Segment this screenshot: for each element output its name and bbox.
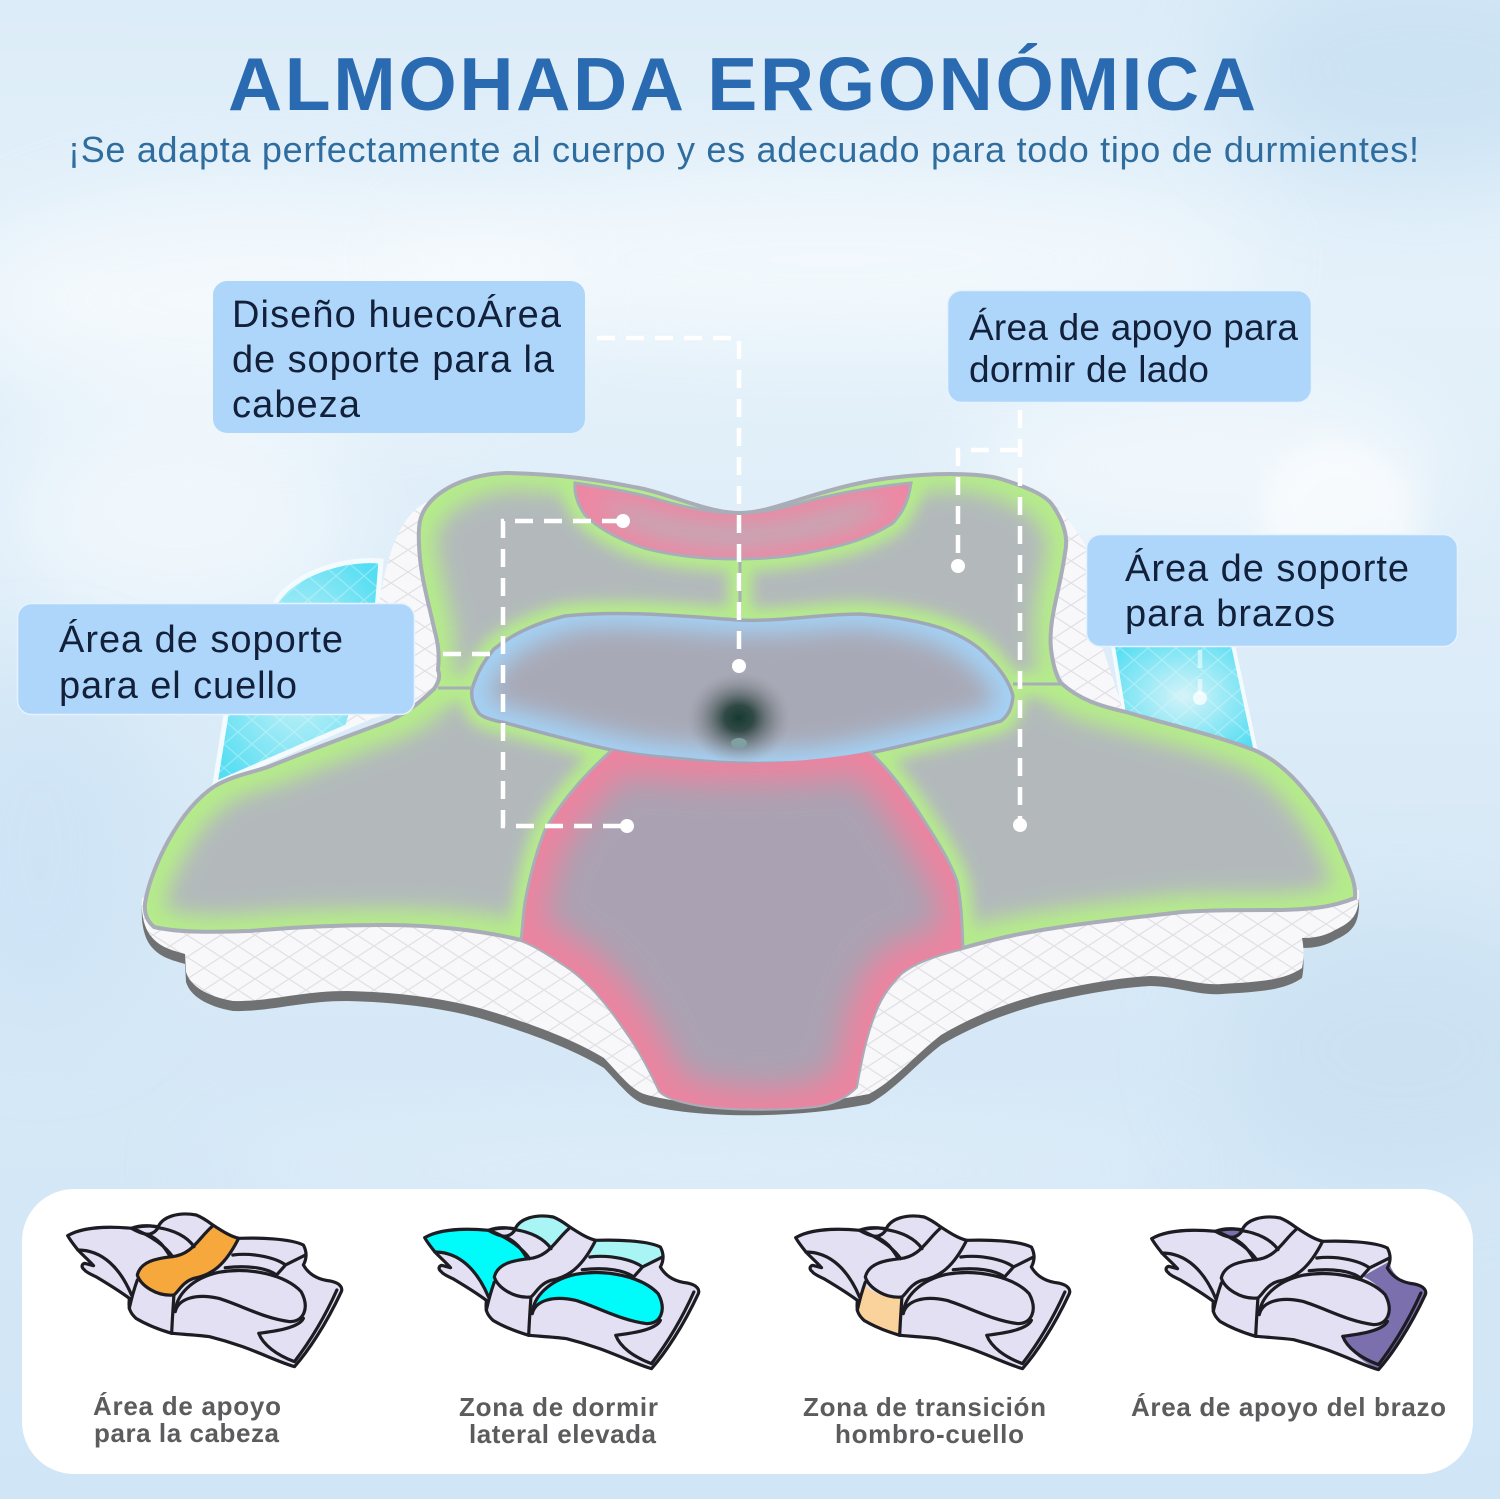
icon: arm support: [1152, 1217, 1426, 1370]
rear white lobes: [345, 502, 1125, 726]
callout: arms: para brazos: [1125, 593, 1335, 635]
pillow base side with dark edge: [142, 890, 1359, 1115]
pillow illustration: [142, 473, 1359, 1115]
dashed leader lines: [443, 338, 1200, 826]
callout: side sleeping: [948, 290, 1312, 402]
callout: neck: Área de soporte: [59, 618, 343, 661]
icon: neck shoulder transition: [796, 1216, 1070, 1369]
title: ALMOHADA ERGONÓMICA: [228, 42, 1256, 126]
callout: arms: Área de soporte: [1125, 547, 1409, 590]
leader: side sleep: [958, 410, 1020, 822]
leader: head hollow: [597, 338, 739, 660]
caption: side sleeping: Zona de dormir: [459, 1392, 658, 1422]
callout: hollow design: cabeza: [232, 384, 361, 426]
callout: hollow design: de soporte para la: [232, 339, 555, 381]
caption: side sleeping: lateral elevada: [469, 1419, 657, 1449]
leader: neck stub: [443, 652, 492, 656]
caption: arm support: Área de apoyo del brazo: [1131, 1392, 1446, 1422]
subtitle: ¡Se adapta perfectamente al cuerpo y es adecuado para todo tipo de durmientes!: [68, 129, 1419, 170]
top surface green zones: [145, 473, 1355, 1109]
callout: side sleeping: dormir de lado: [969, 349, 1209, 390]
caption: neck shoulder transition: hombro-cuello: [835, 1419, 1024, 1449]
leader: neck: [503, 521, 622, 826]
callout: hollow design: [213, 281, 585, 433]
leader: arm: [1198, 650, 1202, 695]
callout: neck: [18, 604, 414, 714]
callout: side sleeping: Área de apoyo para: [969, 307, 1298, 348]
front pink zone: [521, 750, 963, 1109]
callout: hollow design: Diseño huecoÁrea: [232, 293, 562, 336]
icon: head support: [68, 1214, 342, 1367]
icon: side sleeping: [425, 1216, 699, 1369]
caption: neck shoulder transition: Zona de transición: [803, 1392, 1046, 1422]
callout: arms: [1086, 534, 1458, 646]
callout: neck: para el cuello: [59, 665, 297, 707]
neck blue zone: [472, 613, 1013, 763]
left rear cyan arm: [215, 561, 381, 784]
top head pink zone: [575, 483, 911, 559]
caption: head support: para la cabeza: [94, 1418, 280, 1448]
central hole: [687, 672, 791, 764]
right rear cyan arm: [1112, 640, 1256, 752]
caption: head support: Área de apoyo: [93, 1391, 281, 1421]
leader dots: [616, 514, 1207, 833]
seam lines: [438, 559, 1061, 688]
panel: zone legend: [22, 1189, 1473, 1474]
